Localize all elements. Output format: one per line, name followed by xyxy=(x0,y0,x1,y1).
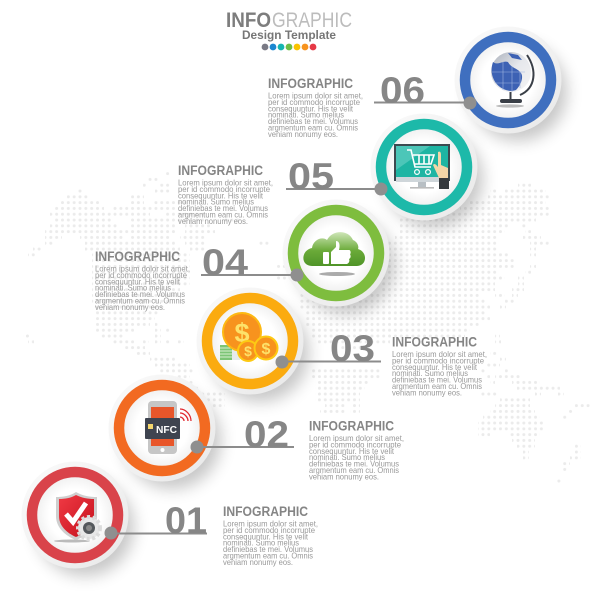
title: GRAPHIC xyxy=(272,9,352,32)
text block 05: consequuntur. His te velit xyxy=(178,191,264,200)
text block 03: nominati. Sumo melius xyxy=(392,369,468,378)
dotted world map background xyxy=(23,174,592,481)
text block 02: argmentum eam cu. Omnis xyxy=(309,466,399,475)
text block 06: consequuntur. His te velit xyxy=(268,104,354,113)
text block 01: per id commodo incorrupte xyxy=(223,526,315,535)
text block 01 xyxy=(223,504,318,567)
text block 03: veniam nonumy eos. xyxy=(392,388,462,397)
text block 03: Lorem ipsum dolor sit amet, xyxy=(392,350,487,359)
icon: NFC phone xyxy=(145,401,191,454)
icon: coins and money: $ xyxy=(262,341,271,358)
text block 01: definiebas te mei. Volumus xyxy=(223,545,313,554)
text block 05: Lorem ipsum dolor sit amet, xyxy=(178,178,273,188)
text block 04: Lorem ipsum dolor sit amet, xyxy=(95,264,190,274)
text block 02: definiebas te mei. Volumus xyxy=(309,460,399,469)
title xyxy=(226,9,352,32)
text block 03: definiebas te mei. Volumus xyxy=(392,376,482,385)
icon: cloud with thumb up xyxy=(303,232,365,276)
text block 04: per id commodo incorrupte xyxy=(95,271,187,280)
icon: coins and money xyxy=(220,313,278,361)
number: 06 xyxy=(380,70,425,111)
step 06 badge xyxy=(374,26,567,141)
colour dots xyxy=(262,44,316,50)
text block 02: INFOGRAPHIC xyxy=(309,418,394,434)
text block 05: argmentum eam cu. Omnis xyxy=(178,210,268,220)
icon: globe xyxy=(491,52,533,108)
text block 03: argmentum eam cu. Omnis xyxy=(392,382,482,391)
text block 01: nominati. Sumo melius xyxy=(223,539,299,548)
text block 04: definiebas te mei. Volumus xyxy=(95,290,185,299)
connector xyxy=(201,274,297,276)
number: 02 xyxy=(244,414,289,455)
number: 05 xyxy=(288,156,334,197)
step 04 badge xyxy=(201,200,395,314)
step 01 badge xyxy=(22,462,207,576)
text block 02: Lorem ipsum dolor sit amet, xyxy=(309,434,404,443)
text block 03: INFOGRAPHIC xyxy=(392,334,477,350)
number: 03 xyxy=(330,328,375,369)
icon: coins and money: $ xyxy=(234,318,250,348)
text block 01: argmentum eam cu. Omnis xyxy=(223,552,313,560)
number: 04 xyxy=(202,242,248,283)
text block 06: veniam nonumy eos. xyxy=(268,130,338,139)
text block 03: per id commodo incorrupte xyxy=(392,356,484,365)
text block 05: nominati. Sumo melius xyxy=(178,198,254,207)
text block 01: INFOGRAPHIC xyxy=(223,504,308,519)
text block 03 xyxy=(392,334,487,397)
step 03 badge xyxy=(196,288,381,402)
number: 01 xyxy=(165,500,207,541)
step 05 badge xyxy=(286,114,483,228)
text block 02: veniam nonumy eos. xyxy=(309,472,379,481)
text block 04: INFOGRAPHIC xyxy=(95,249,180,264)
connector xyxy=(197,446,294,448)
text block 06: definiebas te mei. Volumus xyxy=(268,117,358,126)
text block 05: INFOGRAPHIC xyxy=(178,163,263,178)
text block 02: nominati. Sumo melius xyxy=(309,453,385,462)
icon: coins and money: $ xyxy=(244,343,252,359)
text block 06: Lorem ipsum dolor sit amet, xyxy=(268,92,363,100)
text block 06: INFOGRAPHIC xyxy=(268,76,353,91)
text block 01: veniam nonumy eos. xyxy=(223,558,293,567)
icon: monitor with cart xyxy=(394,144,450,189)
text block 04: nominati. Sumo melius xyxy=(95,284,171,293)
icon: NFC phone: NFC xyxy=(156,425,177,436)
text block 03: consequuntur. His te velit xyxy=(392,363,478,372)
text block 04: veniam nonumy eos. xyxy=(95,303,165,312)
connector xyxy=(286,188,381,190)
connector xyxy=(282,360,381,362)
text block 01: Lorem ipsum dolor sit amet, xyxy=(223,520,318,528)
connector xyxy=(111,532,207,534)
text block 02: per id commodo incorrupte xyxy=(309,440,401,449)
icon: shield with gear xyxy=(54,492,100,542)
text block 02: consequuntur. His te velit xyxy=(309,447,395,456)
text block 01: consequuntur. His te velit xyxy=(223,532,309,541)
text block 04 xyxy=(95,249,190,312)
text block 06: argmentum eam cu. Omnis xyxy=(268,124,358,132)
subtitle: Design Template xyxy=(242,28,336,42)
text block 06: per id commodo incorrupte xyxy=(268,98,360,107)
text block 04: consequuntur. His te velit xyxy=(95,277,181,286)
text block 05: veniam nonumy eos. xyxy=(178,217,248,226)
title: INFO xyxy=(226,9,271,32)
text block 05 xyxy=(178,163,273,226)
text block 05: per id commodo incorrupte xyxy=(178,185,270,194)
text block 06 xyxy=(268,76,363,139)
text block 05: definiebas te mei. Volumus xyxy=(178,204,268,213)
text block 06: nominati. Sumo melius xyxy=(268,111,344,120)
connector xyxy=(374,102,470,104)
text block 02 xyxy=(309,418,404,481)
step 02 badge xyxy=(108,374,294,489)
text block 04: argmentum eam cu. Omnis xyxy=(95,296,185,306)
